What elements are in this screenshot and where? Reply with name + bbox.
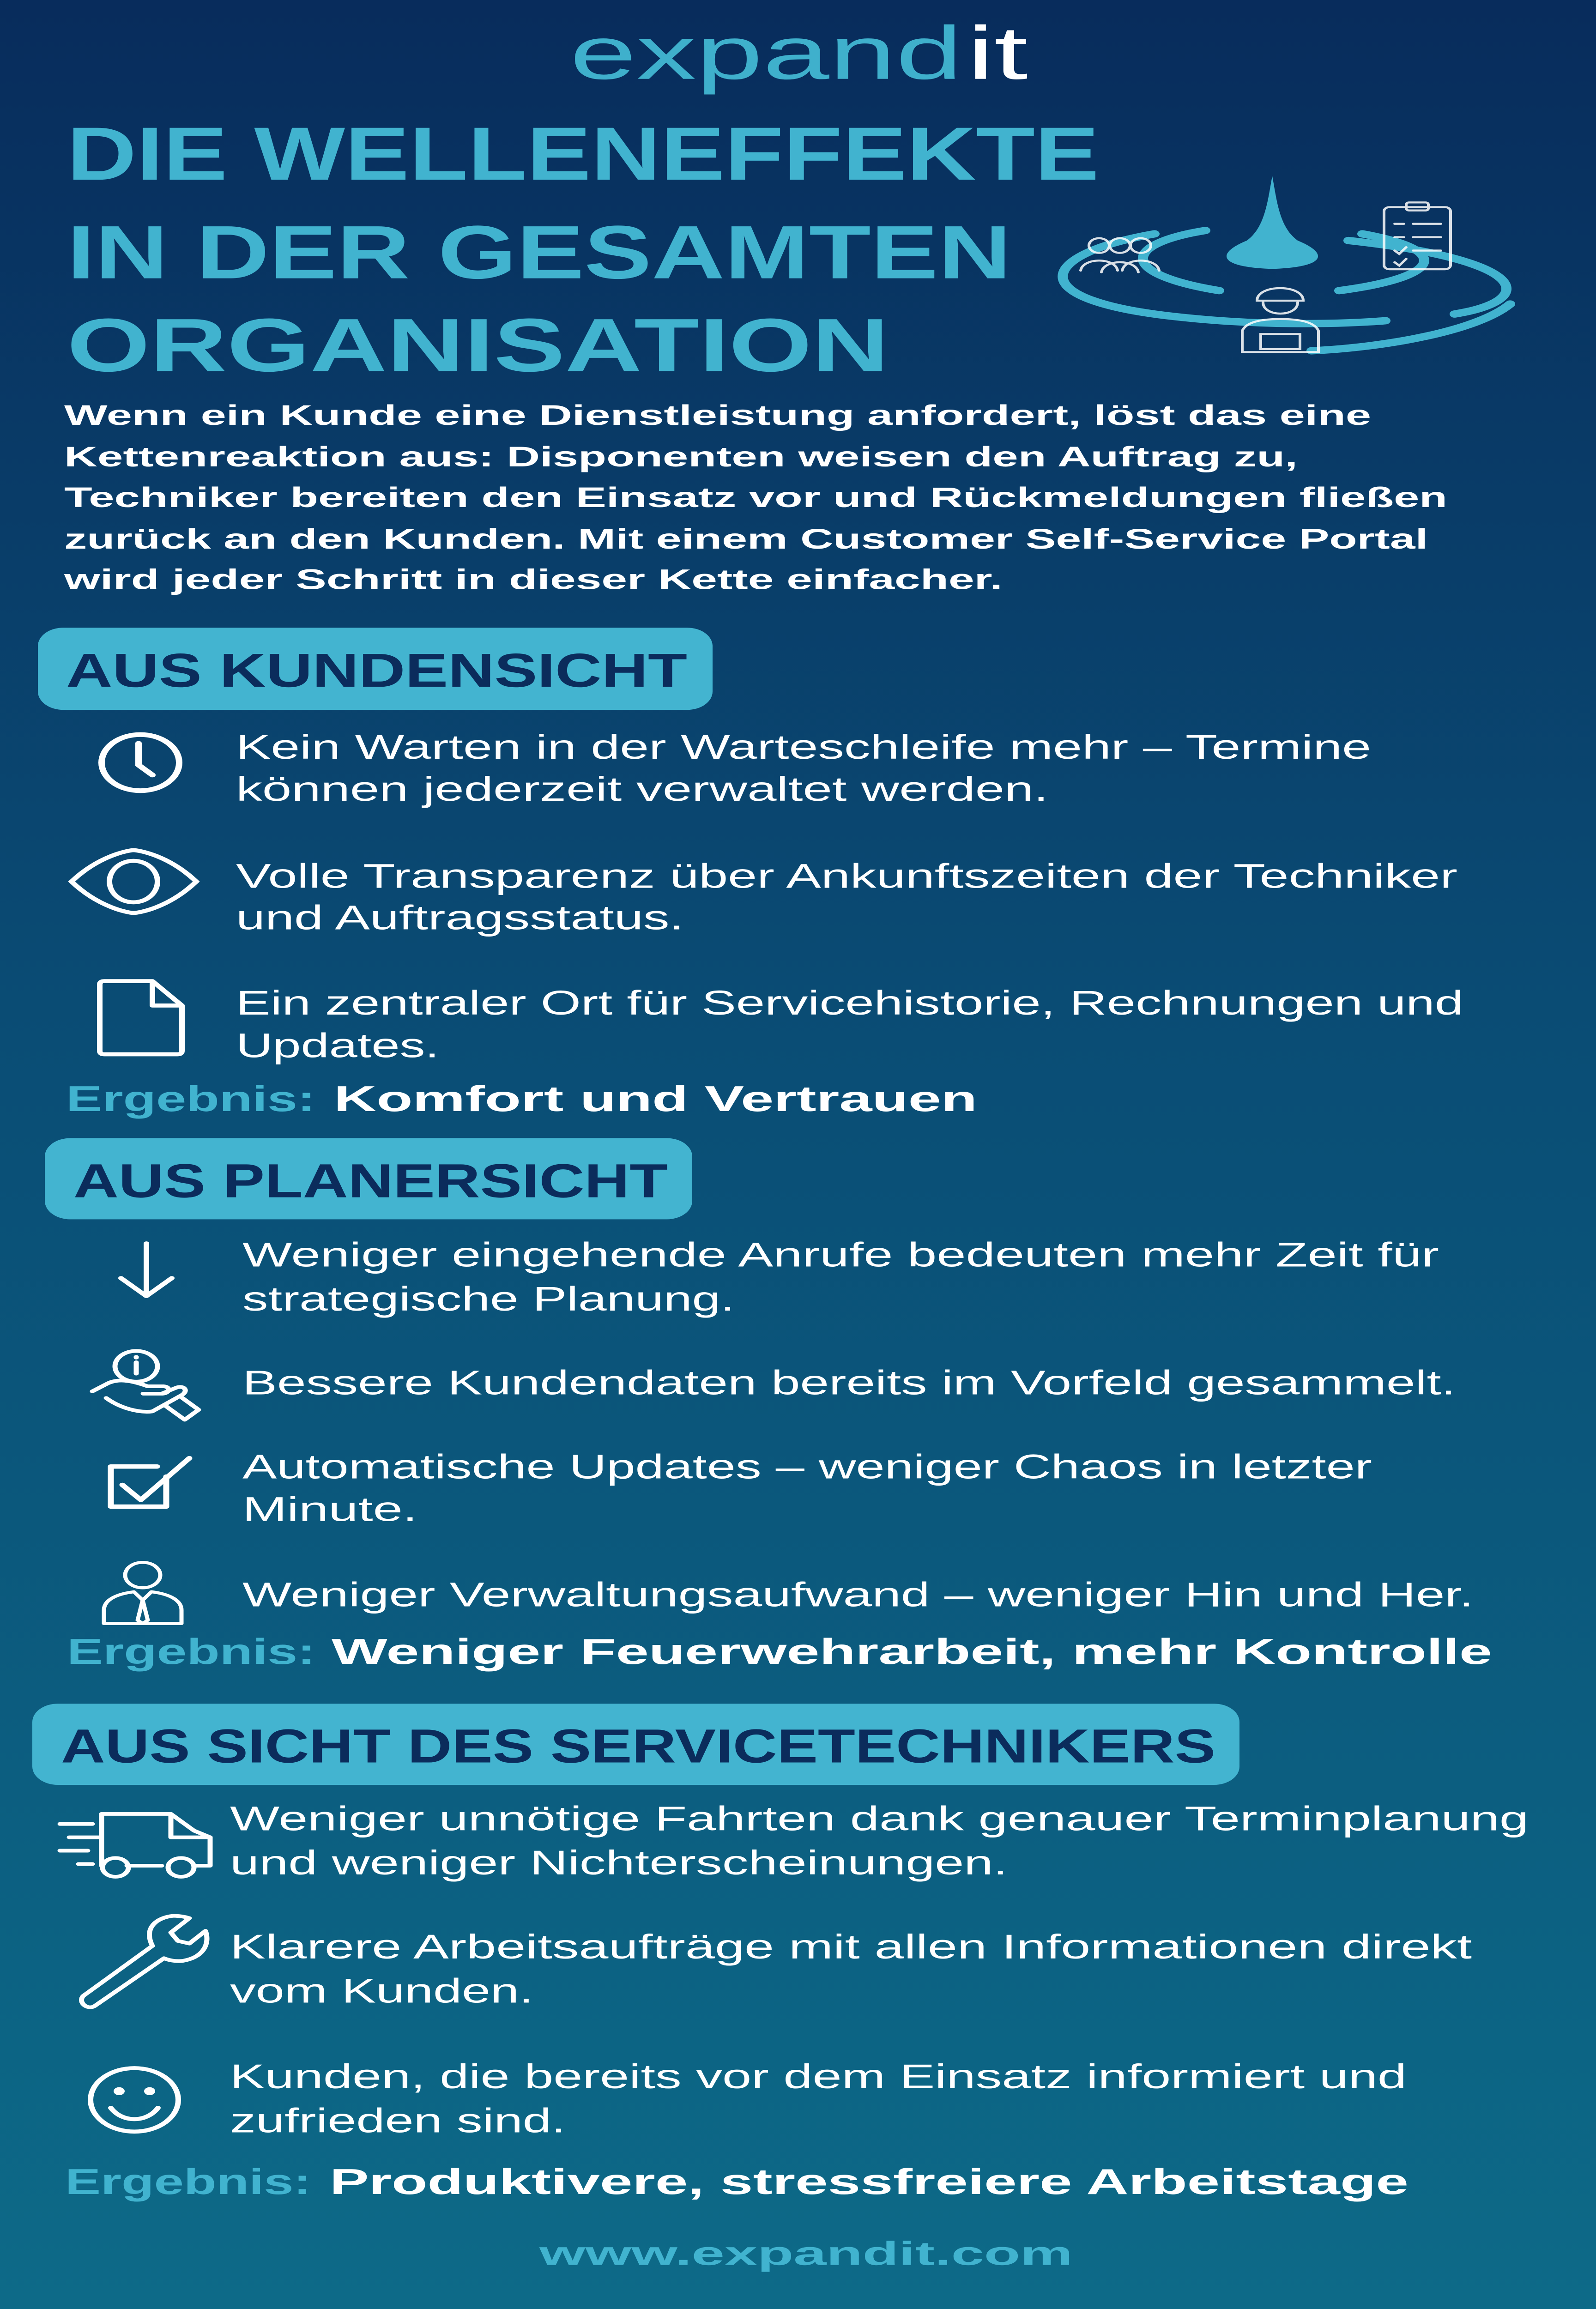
item: info hand: Bessere Kundendaten bereits im Vorfeld gesammelt. xyxy=(242,1364,1456,1402)
item: eye: Volle Transparenz über Ankunftszeiten der Techniker xyxy=(236,857,1457,895)
section header: Aus Kundensicht: AUS KUNDENSICHT xyxy=(66,644,687,697)
icon: clock xyxy=(102,735,179,791)
title xyxy=(67,111,1099,387)
result 1 xyxy=(66,1079,977,1119)
item: administrator xyxy=(104,1562,1474,1624)
item: clock xyxy=(102,728,1371,809)
section header: Aus Planersicht xyxy=(45,1138,692,1219)
section header: Aus Planersicht: AUS PLANERSICHT xyxy=(73,1154,668,1208)
result 2: Ergebnis: xyxy=(67,1632,315,1672)
item: truck: und weniger Nichterscheinungen. xyxy=(230,1844,1008,1882)
section header: Aus Kundensicht xyxy=(38,628,713,710)
item: document: Ein zentraler Ort für Servicehistorie, Rechnungen und xyxy=(236,984,1463,1022)
footer url: www.expandit.com xyxy=(539,2235,1073,2272)
item: truck: Weniger unnötige Fahrten dank genauer Terminplanung xyxy=(230,1800,1529,1838)
item: clock: können jederzeit verwaltet werden. xyxy=(236,770,1048,809)
intro paragraph: wird jeder Schritt in dieser Kette einfacher. xyxy=(64,564,1003,595)
item: eye xyxy=(72,850,1457,937)
item: document xyxy=(100,981,1463,1065)
icon: arrow down xyxy=(121,1243,172,1296)
intro paragraph xyxy=(64,399,1447,595)
icon: wrench xyxy=(82,1916,207,2007)
item: smiley: Kunden, die bereits vor dem Einsatz informiert und xyxy=(230,2058,1407,2096)
title: DIE WELLENEFFEKTE xyxy=(67,111,1099,196)
ripples xyxy=(1063,230,1510,351)
item: info hand xyxy=(92,1351,1456,1420)
item: document: Updates. xyxy=(236,1027,439,1065)
intro paragraph: Techniker bereiten den Einsatz vor und Rückmeldungen fließen xyxy=(64,482,1447,513)
item: truck xyxy=(60,1800,1529,1882)
title: IN DER GESAMTEN xyxy=(67,210,1011,294)
icon: info hand xyxy=(92,1351,199,1420)
result 1: Ergebnis: xyxy=(66,1079,315,1119)
item: clock: Kein Warten in der Warteschleife mehr – Termine xyxy=(236,728,1371,766)
intro paragraph: zurück an den Kunden. Mit einem Customer Self-Service Portal xyxy=(64,523,1428,555)
item: wrench xyxy=(82,1916,1472,2010)
icon: truck xyxy=(60,1814,210,1877)
result 2: Weniger Feuerwehrarbeit, mehr Kontrolle xyxy=(332,1632,1492,1672)
item: administrator: Weniger Verwaltungsaufwand – weniger Hin und Her. xyxy=(242,1576,1474,1614)
icon: document xyxy=(100,981,182,1054)
result 3: Ergebnis: xyxy=(65,2162,311,2202)
people icon xyxy=(1081,238,1159,272)
intro paragraph: Wenn ein Kunde eine Dienstleistung anfordert, löst das eine xyxy=(64,399,1371,431)
result 2 xyxy=(67,1632,1492,1672)
section header: Servicetechniker xyxy=(32,1704,1239,1785)
header illustration: ripple drop xyxy=(1063,176,1510,352)
item: checkbox: Minute. xyxy=(242,1490,417,1529)
result 3: Produktivere, stressfreiere Arbeitstage xyxy=(330,2162,1409,2202)
logo: it xyxy=(967,11,1028,95)
item: eye: und Auftragsstatus. xyxy=(236,899,684,937)
drop xyxy=(1227,176,1318,269)
item: checkbox xyxy=(111,1448,1372,1529)
item: smiley: zufrieden sind. xyxy=(230,2102,566,2140)
item: arrow xyxy=(121,1236,1439,1318)
item: arrow: strategische Planung. xyxy=(242,1280,735,1318)
clipboard icon xyxy=(1384,202,1451,269)
item: smiley xyxy=(91,2058,1407,2140)
icon: checkbox xyxy=(111,1458,189,1506)
item: arrow: Weniger eingehende Anrufe bedeuten mehr Zeit für xyxy=(242,1236,1439,1274)
icon: person with tie xyxy=(104,1562,181,1624)
title: ORGANISATION xyxy=(67,302,889,387)
icon: eye xyxy=(72,850,196,913)
item: wrench: Klarere Arbeitsaufträge mit allen Informationen direkt xyxy=(230,1928,1472,1966)
intro paragraph: Kettenreaktion aus: Disponenten weisen den Auftrag zu, xyxy=(64,441,1298,472)
result 1: Komfort und Vertrauen xyxy=(334,1079,977,1119)
result 3 xyxy=(65,2162,1409,2202)
icon: smiley xyxy=(91,2068,178,2132)
item: wrench: vom Kunden. xyxy=(230,1972,533,2010)
logo: expand xyxy=(570,11,962,95)
section header: Servicetechniker: AUS SICHT DES SERVICETECHNIKERS xyxy=(61,1720,1215,1773)
item: checkbox: Automatische Updates – weniger Chaos in letzter xyxy=(242,1448,1372,1486)
worker icon xyxy=(1242,288,1318,352)
